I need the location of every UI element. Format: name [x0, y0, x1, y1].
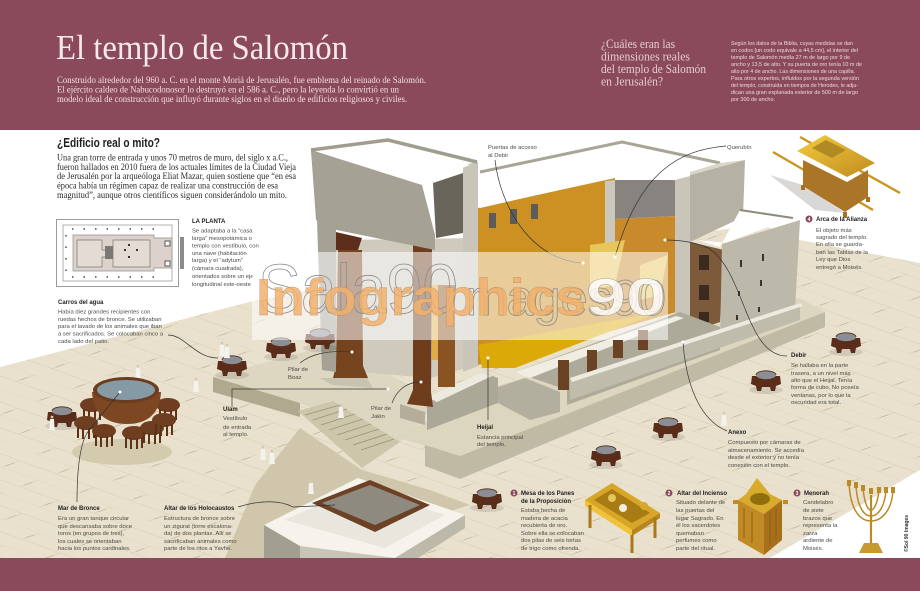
interior pillar: [605, 180, 615, 252]
column Boaz: [333, 250, 368, 378]
watermark: [252, 250, 668, 340]
hall roof: [480, 142, 720, 208]
dimensions question: [601, 37, 707, 88]
Altar of burnt offerings: [264, 478, 465, 558]
watermark: Infographics: [256, 269, 586, 327]
text: arca de la alianza: [806, 216, 869, 271]
watermark: mages90: [466, 270, 666, 326]
text: debir: forma de cubo. No poseía: [791, 385, 860, 391]
text: menorah: de siete: [803, 508, 824, 514]
plinth top: [395, 298, 825, 456]
interior hall gold wall: [478, 178, 615, 365]
text: menorah: Moisés.: [803, 546, 824, 552]
plinth front: [425, 312, 825, 479]
text: menorah: 3: [796, 491, 799, 497]
text: menorah: ardiente de: [803, 538, 833, 544]
text: arca de la alianza: El objeto más: [816, 228, 852, 234]
header band: [0, 0, 920, 130]
text: altar de los holocaustos: Estructura de bronce sobre: [164, 516, 236, 522]
text: la planta: [192, 219, 259, 288]
Sea of Bronze: [72, 377, 180, 465]
text: altar del incienso: parte del ritual.: [676, 546, 715, 552]
text: mesa de los panes: dos pilas de seis tortas: [521, 538, 581, 544]
dimensions answer: [731, 41, 862, 103]
text: carros del agua: para el lavado de los animales que iban: [58, 324, 162, 330]
text: la planta: larga” mesopotámica o: [192, 236, 253, 242]
text: anexo: desde el exterior y no tenía: [728, 455, 800, 461]
text: real or myth: de Jerusalén por la arqueóloga Eliat Mazar, quien sostiene que “en esa: [57, 171, 296, 181]
text: ulam: [223, 407, 252, 438]
text: arca de la alianza: entregó a Moisés.: [816, 265, 863, 271]
white wall top: [515, 316, 684, 378]
outer low wall front: [427, 372, 498, 430]
dimensions answer: alto por 4 de ancho. Las dimensiones de una capilla.: [731, 69, 855, 75]
tower roof: [314, 142, 470, 183]
text: altar de los holocaustos: un zigurat (torre escalona-: [164, 524, 233, 530]
text: ulam: de entrada: [223, 425, 252, 431]
callout lines: [77, 146, 787, 507]
text: altar del incienso: Altar del Incienso: [677, 491, 727, 497]
dimensions question: del templo de Salomón: [601, 62, 707, 76]
cherubim: [590, 240, 668, 300]
bright door: [432, 285, 440, 360]
capital Boaz: [327, 230, 362, 250]
label: pilar de boaz: Pilar de: [288, 367, 309, 373]
text: la planta: LA PLANTA: [192, 219, 226, 225]
intro text: [57, 75, 426, 105]
text: heijal: del templo.: [477, 442, 506, 448]
text: altar de los holocaustos: [164, 506, 237, 552]
label: pilar de jakin: Pilar de: [371, 406, 392, 412]
tower rim: [311, 140, 477, 162]
text: altar de los holocaustos: da) de dos plantas. Allí se: [164, 531, 232, 537]
annex windows: [699, 255, 709, 322]
text: mesa de los panes: de la Proposición: [521, 499, 571, 505]
text: real or myth: Una gran torre de entrada y unos 70 metros de muro, del siglo x a.C.,: [57, 152, 288, 162]
text: mar de bronce: que descansaba sobre doce: [58, 524, 133, 530]
text: mar de bronce: Era un gran tanque circular: [58, 516, 129, 522]
intro text: Construido alrededor del 960 a. C. en el monte Moriá de Jerusalén, fue emblema del reinado de Salomón.: [57, 75, 426, 86]
text: menorah: representa la: [803, 523, 838, 529]
icon: table of shewbread: [585, 483, 660, 553]
text: mesa de los panes: 1: [513, 491, 516, 497]
dimensions answer: en codos [un codo equivale a 44,5 cm], el interior del: [731, 48, 858, 54]
annex brown section: [690, 242, 724, 332]
dimensions answer: por 300 de ancho.: [731, 97, 775, 103]
text: arca de la alianza: Ley que Dios: [816, 257, 850, 263]
text: altar del incienso: Situado delante de: [676, 500, 726, 506]
tower base platform: [213, 345, 440, 442]
text: carros del agua: a ser sacrificados. Se colocaban cinco a: [58, 332, 164, 338]
text: mesa de los panes: [510, 490, 584, 552]
dimensions question: en Jerusalén?: [601, 74, 663, 88]
label: puertas de acceso: Puertas de acceso: [488, 145, 538, 151]
text: la planta: templo con vestíbulo, con: [192, 244, 259, 250]
column Jakin base: [400, 404, 425, 425]
text: debir: Debir: [791, 353, 807, 359]
intro text: modelo ideal de construcción que influyó durante siglos en el diseño de edificios religiosos y civiles.: [57, 94, 407, 105]
side block slits: [737, 254, 763, 320]
text: real or myth: época había un régimen capaz de realizar una construcción de esa: [57, 180, 278, 190]
temple building: [213, 140, 825, 479]
porch interior: [336, 238, 478, 378]
text: anexo: Compuesto por cámaras de: [728, 440, 801, 446]
text: arca de la alianza: En ella se guarda-: [816, 242, 864, 248]
yellow floor: [478, 312, 660, 368]
text: debir: trasera, a un nivel más: [791, 371, 851, 377]
right block face: [720, 220, 800, 342]
low wall top: [427, 372, 492, 402]
text: la planta: una nave (habitación: [192, 251, 247, 257]
text: altar de los holocaustos: Altar de los Holocaustos: [164, 506, 235, 512]
text: mar de bronce: hacia los puntos cardinales.: [58, 546, 131, 552]
platform front wall: [213, 377, 300, 417]
inner long wall: [515, 312, 720, 405]
pier base: [320, 378, 373, 388]
text: mesa de los panes: Mesa de los Panes: [521, 491, 575, 497]
text: debir: [791, 353, 860, 406]
text: la planta: longitudinal este-oeste: [192, 282, 252, 288]
annex long outer wall: [570, 303, 800, 400]
right tower: [690, 160, 745, 242]
watermark: Sala90: [258, 250, 458, 328]
back room wall: [615, 216, 676, 330]
text: anexo: conexión con el templo.: [728, 463, 790, 469]
text: mesa de los panes: de trigo como ofrenda.: [521, 546, 580, 552]
watermark: 90: [586, 269, 666, 327]
text: altar del incienso: él los sacerdotes: [676, 523, 720, 529]
label: pilar de jakin: Jakin: [371, 414, 385, 420]
dimensions answer: Según los datos de la Biblia, cuyas medidas se dan: [731, 41, 853, 47]
dimensions question: dimensiones reales: [601, 50, 690, 64]
text: arca de la alianza: ban las Tablas de la: [816, 250, 869, 256]
back room upper: [615, 180, 676, 219]
text: mar de bronce: toros (en grupos de tres),: [58, 531, 125, 537]
text: debir: Se hallaba en la parte: [791, 363, 849, 369]
label: pilar de boaz: [288, 367, 309, 381]
text: real or myth: [57, 152, 296, 200]
text: mar de bronce: los cuales se orientaban: [58, 539, 122, 545]
text: anexo: almacenamiento. Se accedía: [728, 448, 805, 454]
text: carros del agua: Carros del agua: [58, 300, 104, 306]
text: anexo: [728, 430, 805, 469]
text: arca de la alianza: sagrado del templo.: [816, 235, 868, 241]
text: heijal: [477, 425, 523, 448]
text: altar del incienso: [666, 490, 727, 552]
right block roof rim: [740, 210, 793, 218]
text: real or myth: fueron hallados en 2010 fuera de los actuales límites de la Ciudad Vieja: [57, 162, 296, 172]
text: altar del incienso: quemaban: [676, 531, 704, 537]
text: ulam: Ulam: [223, 407, 238, 413]
text: menorah: Menorah: [804, 491, 829, 497]
text: menorah: brazos que: [803, 516, 833, 522]
text: altar del incienso: las puertas del: [676, 508, 714, 514]
right block roof: [698, 210, 793, 247]
text: altar de los holocaustos: sacrificaban animales como: [164, 539, 237, 545]
text: real or myth: magnitud”, aunque otros científicos siguen considerándolo un mito.: [57, 190, 287, 200]
text: ulam: Vestíbulo: [223, 416, 248, 422]
text: la planta: (cámara cuadrada),: [192, 266, 244, 272]
text: arca de la alianza: Arca de la Alianza: [816, 217, 868, 223]
text: menorah: zarza: [803, 531, 818, 537]
text: carros del agua: ruedas hechos de bronce. Se utilizaban: [58, 317, 161, 323]
tower pillar light: [463, 162, 478, 372]
tower front: [311, 150, 435, 250]
dimensions answer: del templo, construida en tiempos de Herodes, le adju-: [731, 83, 858, 89]
text: arca de la alianza: 4: [808, 217, 811, 223]
label: pilar de jakin: [371, 406, 392, 420]
icon: menorah: [849, 480, 893, 553]
icon: ark of the covenant: [770, 135, 900, 218]
bottom band: [0, 558, 920, 591]
text: mar de bronce: Mar de Bronce: [58, 506, 100, 512]
text: anexo: Anexo: [728, 430, 747, 436]
annex doors: [558, 330, 648, 390]
text: heijal: Heijal: [477, 425, 493, 431]
text: altar del incienso: 2: [668, 491, 671, 497]
text: altar de los holocaustos: parte de los ritos a Yavhé.: [164, 546, 232, 552]
floor: [0, 224, 920, 558]
dimensions answer: templo de Salomón medía 27 m de largo por 9 de: [731, 55, 850, 61]
title: El templo de Salomón: [56, 28, 348, 67]
text: menorah: [794, 490, 838, 552]
text: debir: alto que el Heijal. Tenía: [791, 378, 853, 384]
text: debir: oscuridad era total.: [791, 400, 841, 406]
low wall corner: [498, 378, 560, 420]
page background: [0, 130, 920, 558]
credit: ©Sol 90 Images: [903, 515, 910, 552]
text: mesa de los panes: madera de acacia: [521, 516, 569, 522]
text: mesa de los panes: Estaba hecha de: [521, 508, 566, 514]
heading: real or myth: ¿Edificio real o mito?: [57, 136, 160, 150]
stairs: [298, 401, 400, 468]
right tower roof: [690, 160, 745, 175]
text: carros del agua: [58, 300, 164, 345]
icon: incense altar: [733, 478, 788, 555]
text: la planta: orientados sobre un eje: [192, 274, 254, 280]
label: pilar de boaz: Boaz: [288, 375, 301, 381]
text: altar del incienso: perfumes como: [676, 538, 717, 544]
annex wall top: [570, 303, 803, 382]
water carts: [45, 329, 863, 512]
text: carros del agua: Había diez grandes recipientes con: [58, 310, 150, 316]
text: heijal: Estancia principal: [477, 435, 523, 441]
figures: [49, 342, 727, 494]
label: querubin: Querubín: [727, 145, 752, 151]
roof rim: [480, 142, 720, 172]
text: menorah: Candelabro: [803, 500, 834, 506]
text: la planta: Se adaptaba a la “casa: [192, 228, 253, 234]
label: puertas de acceso: al Debir: [488, 153, 508, 159]
door leaf: [438, 285, 455, 387]
windows: [489, 204, 538, 228]
intro text: El ejército caldeo de Nabucodonosor lo destruyó en el 586 a. C., pero la leyenda lo convirtió en un: [57, 84, 399, 96]
floor plan: [56, 220, 184, 286]
text: mesa de los panes: Sobre ella se colocaban: [521, 531, 584, 537]
dimensions answer: ancho y 13,5 de alto. Y su puerta de oro tenía 10 m de: [731, 62, 862, 68]
column Jakin: [407, 245, 433, 407]
text: ulam: al templo.: [223, 432, 249, 438]
text: carros del agua: cada lado del patio.: [58, 339, 109, 345]
text: mar de bronce: [58, 506, 133, 552]
text: la planta: larga) y el “adytum”: [192, 258, 243, 264]
dimensions question: ¿Cuáles eran las: [601, 37, 675, 51]
dimensions answer: dican una gran explanada exterior de 500 m de largo: [731, 90, 858, 96]
text: debir: ventanas, por lo que la: [791, 393, 851, 399]
dimensions answer: Para otros expertos, influidos por la segunda versión: [731, 76, 859, 82]
shaded floor: [225, 428, 470, 558]
right pilaster: [675, 176, 690, 325]
text: altar del incienso: lugar Sagrado. En: [676, 516, 724, 522]
text: mesa de los panes: recubierta de oro.: [521, 523, 568, 529]
left pier: [311, 150, 336, 372]
tower side dark: [433, 173, 463, 238]
label: puertas de acceso: [488, 145, 538, 159]
